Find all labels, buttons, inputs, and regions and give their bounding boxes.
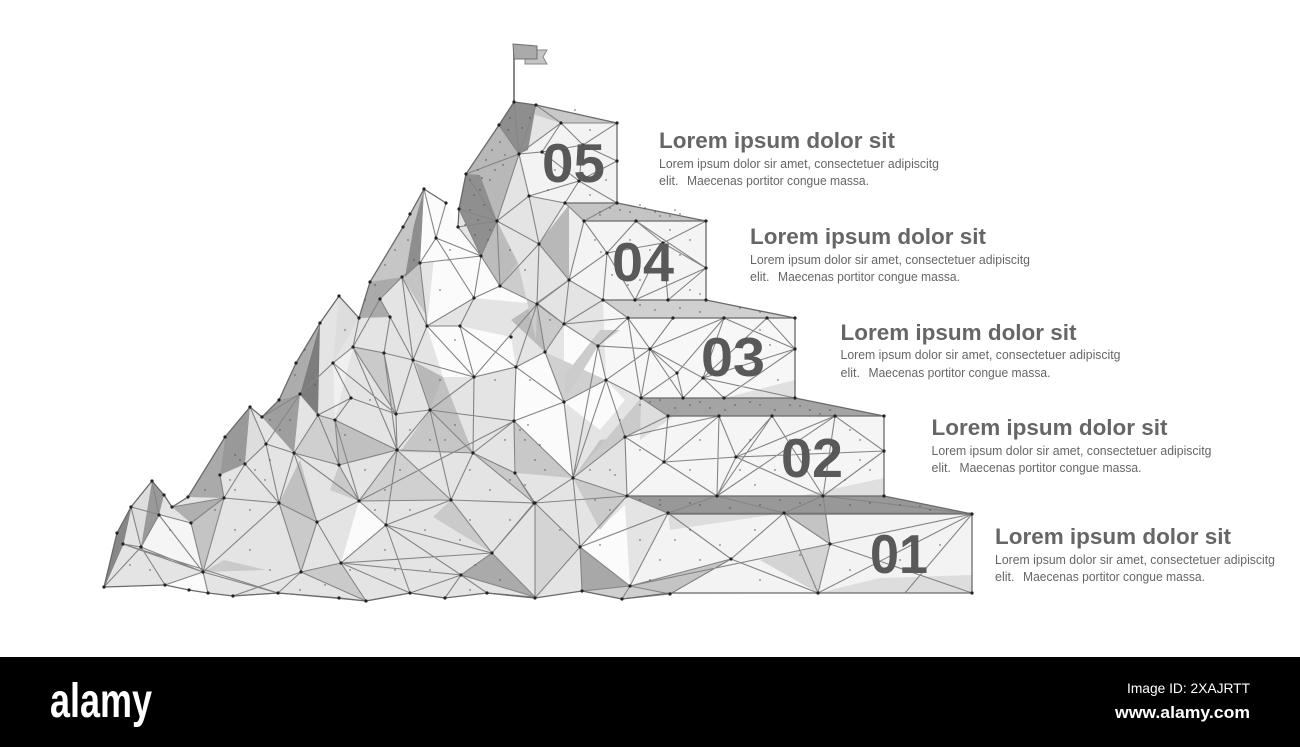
step number 01: 01 [870, 523, 928, 585]
text block: step 04 [750, 224, 1030, 284]
text block: step 02: Lorem ipsum dolor sir amet, consectetuer adipiscitg [932, 444, 1212, 458]
text block: step 01 [995, 524, 1275, 584]
text block: step 03: Lorem ipsum dolor sit [840, 320, 1077, 345]
speckle particles [130, 110, 940, 590]
footer band with watermark credits: www.alamy.com [1114, 703, 1250, 722]
text block: step 02: elit. [932, 461, 951, 475]
mountain base silhouette [104, 102, 972, 601]
text block: step 01: Lorem ipsum dolor sir amet, consectetuer adipiscitg [995, 553, 1275, 567]
text block: step 01: Lorem ipsum dolor sit [995, 524, 1232, 549]
footer band with watermark credits: Image ID: 2XAJRTT [1127, 680, 1250, 696]
text block: step 05: Maecenas portitor congue massa. [687, 174, 869, 188]
icon: summit flag [513, 44, 547, 102]
text block: step 04: Lorem ipsum dolor sit [750, 224, 987, 249]
footer band with watermark credits: alamy [50, 675, 152, 728]
wireframe edges [104, 102, 972, 601]
text block: step 03: elit. [840, 366, 860, 380]
bold edge strokes on steps and outline [104, 102, 972, 601]
text block: step 04: elit. [750, 270, 769, 284]
step number 03: 03 [701, 326, 765, 388]
text block: step 02: Maecenas portitor congue massa. [960, 461, 1142, 475]
text block: step 02: Lorem ipsum dolor sit [932, 415, 1168, 440]
text block: step 05: Lorem ipsum dolor sir amet, consectetuer adipiscitg [659, 157, 939, 171]
shaded rock faces [104, 102, 536, 587]
step top faces [526, 105, 972, 514]
text block: step 04: Maecenas portitor congue massa. [778, 270, 960, 284]
text block: step 03: Maecenas portitor congue massa. [868, 366, 1050, 380]
text block: step 04: Lorem ipsum dolor sir amet, consectetuer adipiscitg [750, 253, 1030, 267]
text block: step 05: elit. [659, 174, 678, 188]
text block: step 05 [659, 128, 939, 188]
step number 05: 05 [542, 132, 605, 194]
mountain staircase illustration [104, 102, 972, 601]
network node dots [104, 102, 972, 601]
step number 04: 04 [612, 231, 674, 293]
step number 02: 02 [781, 427, 843, 489]
light facets [141, 123, 972, 593]
mid-grey facets [191, 205, 972, 601]
text block: step 01: elit. [995, 570, 1014, 584]
text block: step 01: Maecenas portitor congue massa. [1023, 570, 1205, 584]
text block: step 02 [932, 415, 1212, 475]
text block: step 03: Lorem ipsum dolor sir amet, consectetuer adipiscitg [840, 348, 1121, 362]
footer band with watermark credits [0, 657, 1300, 747]
text block: step 03 [840, 320, 1121, 380]
text block: step 05: Lorem ipsum dolor sit [659, 128, 896, 153]
